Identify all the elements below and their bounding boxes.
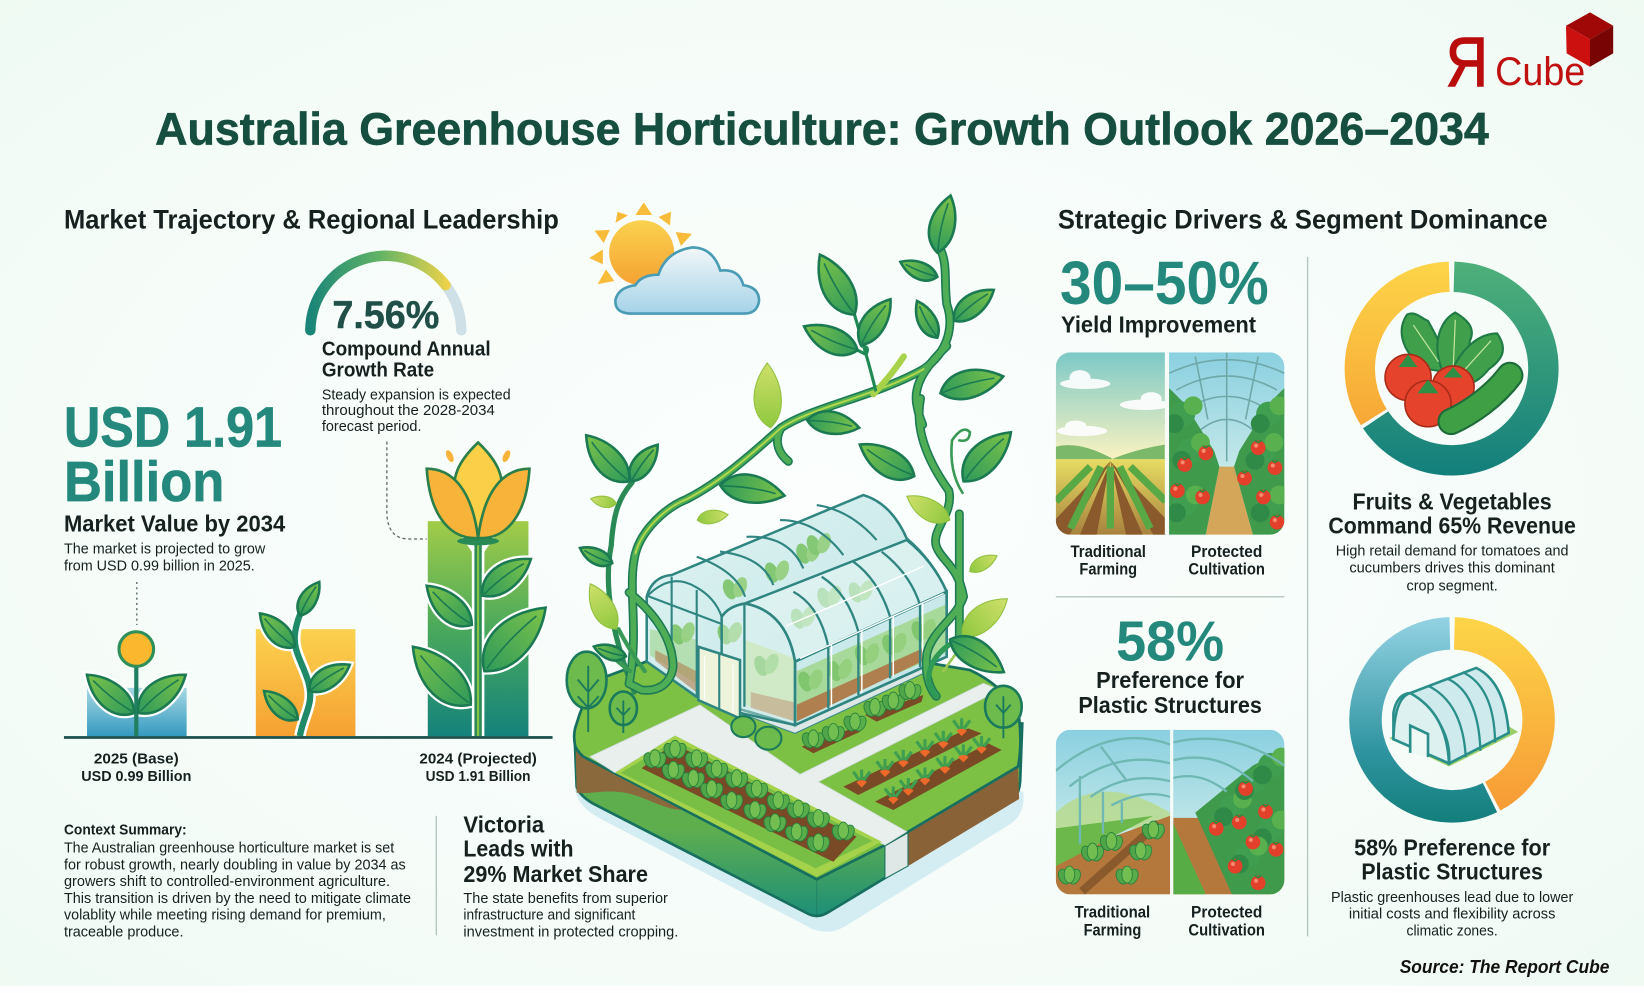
stat: plastic preference: 58%: [1116, 610, 1224, 673]
source note: Source: The Report Cube: [1400, 956, 1609, 977]
donut: plastic structures: [1366, 633, 1539, 806]
axis: [64, 736, 553, 739]
icon: vegetables: [1385, 312, 1510, 427]
text: context summary: for robust growth, nearly doubling in value by 2034 as: [64, 856, 406, 873]
labels: bar labels: [81, 750, 537, 785]
bar: projected: [428, 521, 528, 736]
text: CAGR description: [322, 337, 511, 435]
text: plastic structures: 58% Preference for: [1354, 835, 1550, 861]
tunnel right scene: [1173, 739, 1291, 894]
text: CAGR description: Growth Rate: [322, 358, 434, 381]
stat: market value: [64, 396, 282, 513]
plant: seedling: [78, 632, 193, 736]
text: fruits and vegetables: [1328, 489, 1576, 594]
text: market value description: [64, 511, 285, 574]
stat: yield improvement: 30–50%: [1060, 249, 1269, 317]
heading: strategic drivers: Strategic Drivers & Segment Dominance: [1058, 204, 1548, 235]
text: Victoria callout: infrastructure and significant: [463, 907, 636, 924]
text: fruits and vegetables: cucumbers drives this dominant: [1349, 560, 1556, 577]
vegetable bed: front: [615, 736, 882, 877]
logo: RCube: Cube: [1495, 50, 1585, 94]
text: Victoria callout: Leads with: [463, 836, 574, 862]
text: CAGR description: Compound Annual: [322, 337, 491, 360]
logo: RCube: [1446, 12, 1613, 101]
heading: market trajectory: Market Trajectory & Regional Leadership: [64, 204, 559, 235]
bar: 2025: [87, 688, 187, 736]
title: Australia Greenhouse Horticulture: Growth Outlook 2026–2034: [155, 104, 1489, 155]
icon: hoop house: [1389, 668, 1518, 767]
label: yield improvement: Yield Improvement: [1061, 311, 1256, 337]
labels: plastic comparison: Cultivation: [1188, 921, 1265, 939]
vine leaves: [575, 192, 1020, 682]
trees: [567, 652, 1022, 738]
bar: midpoint: [256, 629, 355, 736]
labels: yield comparison: Cultivation: [1188, 561, 1265, 579]
text: fruits and vegetables: Command 65% Revenue: [1328, 513, 1576, 539]
stat: CAGR value: 7.56%: [332, 294, 439, 337]
tunnel left scene: [1056, 738, 1170, 894]
plant: flowering tulip: [399, 442, 557, 736]
labels: plastic comparison: Traditional: [1075, 904, 1150, 922]
text: fruits and vegetables: High retail demand for tomatoes and: [1336, 543, 1569, 560]
donut: fruits and vegetables: [1360, 277, 1543, 460]
illustration: plastic tunnels: [1056, 730, 1291, 894]
traditional field scene: [1056, 352, 1170, 535]
text: plastic structures: Plastic greenhouses lead due to lower: [1331, 889, 1573, 906]
text: Victoria callout: 29% Market Share: [463, 861, 648, 887]
bar chart: growth plants: [78, 442, 557, 736]
labels: bar labels: USD 1.91 Billion: [426, 768, 531, 785]
greenhouse interior plants: [650, 531, 947, 721]
label: plastic preference: Plastic Structures: [1078, 692, 1262, 718]
text: CAGR description: forecast period.: [322, 419, 421, 435]
labels: plastic comparison: Farming: [1084, 921, 1141, 939]
text: context summary: growers shift to controlled-environment agriculture.: [64, 873, 390, 890]
vines: [608, 243, 991, 696]
greenhouse: [647, 495, 947, 733]
label: plastic preference: Preference for: [1096, 667, 1244, 693]
text: fruits and vegetables: Fruits & Vegetables: [1353, 489, 1552, 515]
gauge: CAGR: [310, 256, 461, 330]
text: context summary: This transition is driven by the need to mitigate climate: [64, 890, 411, 907]
stat: market value: Billion: [64, 450, 224, 513]
text: market value description: The market is projected to grow: [64, 542, 266, 558]
stat: market value: USD 1.91: [64, 396, 282, 459]
text: plastic structures: Plastic Structures: [1361, 859, 1543, 885]
protected cultivation scene: [1165, 352, 1289, 535]
text: fruits and vegetables: crop segment.: [1407, 577, 1498, 594]
label: plastic preference: [1078, 667, 1262, 718]
labels: yield comparison: Farming: [1079, 561, 1137, 579]
text: plastic structures: [1331, 835, 1573, 939]
text: context summary: volablity while meeting rising demand for premium,: [64, 907, 386, 924]
labels: plastic comparison: Protected: [1191, 904, 1262, 922]
text: Victoria callout: The state benefits from superior: [463, 890, 668, 907]
labels: bar labels: 2025 (Base): [94, 750, 179, 767]
text: context summary: The Australian greenhouse horticulture market is set: [64, 839, 395, 856]
vegetable bed: carrots: [843, 718, 1002, 810]
text: market value description: Market Value by 2034: [64, 511, 285, 537]
text: context summary: Context Summary:: [64, 822, 187, 839]
small beds and bushes: [731, 682, 923, 753]
text: Victoria callout: investment in protected cropping.: [463, 923, 678, 940]
text: CAGR description: Steady expansion is expected: [322, 388, 511, 404]
labels: yield comparison: Protected: [1191, 543, 1262, 561]
text: market value description: from USD 0.99 billion in 2025.: [64, 558, 255, 574]
text: context summary: [64, 822, 411, 940]
text: Victoria callout: Victoria: [463, 812, 544, 838]
labels: bar labels: USD 0.99 Billion: [81, 768, 191, 785]
labels: yield comparison: Traditional: [1070, 543, 1146, 561]
illustration: greenhouse island: [567, 192, 1024, 932]
paths: [590, 683, 1000, 845]
platform: [574, 629, 1024, 932]
labels: plastic comparison: [1075, 904, 1265, 939]
text: context summary: traceable produce.: [64, 923, 183, 940]
text: Victoria callout: [463, 812, 678, 940]
logo: RCube: Я: [1446, 23, 1488, 101]
text: plastic structures: initial costs and flexibility across: [1349, 906, 1555, 923]
labels: yield comparison: [1070, 543, 1265, 579]
labels: bar labels: 2024 (Projected): [419, 750, 537, 767]
plant: sapling: [252, 577, 355, 736]
illustration: yield comparison: [1056, 352, 1289, 535]
panel: market trajectory: [64, 204, 678, 940]
text: plastic structures: climatic zones.: [1407, 922, 1498, 939]
text: CAGR description: throughout the 2028-2034: [322, 403, 495, 419]
icon: sun and cloud: [589, 202, 759, 314]
panel: strategic drivers: [1056, 204, 1576, 939]
